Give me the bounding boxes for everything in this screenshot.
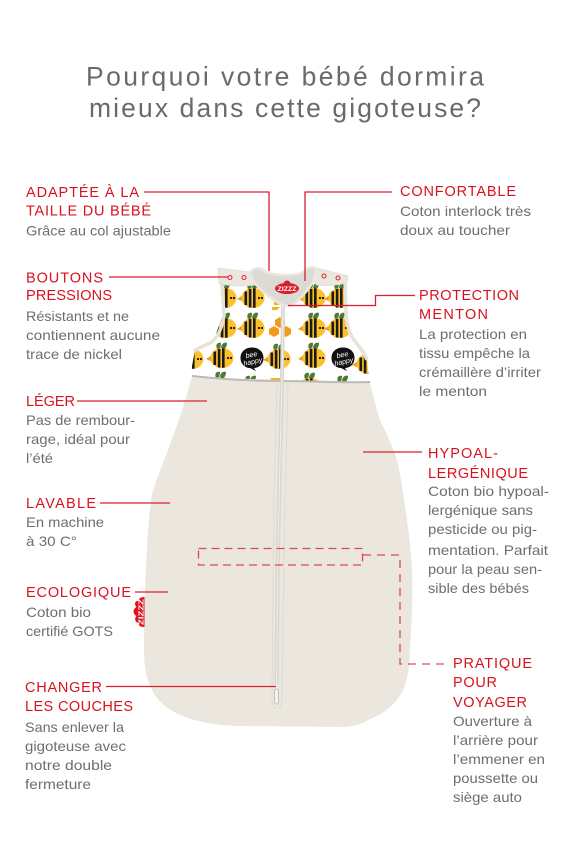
callout: écologique: Coton bio (26, 604, 91, 620)
callout: hypoallergénique: mentation. Parfait (428, 542, 548, 558)
callout: hypoallergénique: LERGÉNIQUE (428, 465, 528, 482)
callout: léger: Pas de rembour- (26, 412, 135, 428)
callout: écologique (26, 585, 131, 639)
callout: protection menton (419, 288, 541, 399)
callout: lavable (26, 496, 104, 549)
red collar label (275, 280, 299, 294)
callout: boutons pressions: Résistants et ne (26, 308, 129, 324)
callout: protection menton: PROTECTION (419, 288, 519, 304)
callout: changer les couches: CHANGER (25, 680, 102, 696)
callout: pratique pour voyager: VOYAGER (453, 695, 527, 711)
snap buttons (228, 274, 340, 280)
callout: hypoallergénique: sible des bébés (428, 580, 529, 596)
callout: changer les couches: Sans enlever la (25, 719, 124, 735)
callout: adaptée: ADAPTÉE À LA (26, 184, 139, 201)
callout: changer les couches: gigoteuse avec (25, 738, 126, 754)
callout: adaptée: TAILLE DU BÉBÉ (26, 202, 151, 220)
callout: boutons pressions: PRESSIONS (26, 288, 112, 304)
callout: léger: rage, idéal pour (26, 431, 130, 447)
callout: écologique: ECOLOGIQUE (26, 585, 131, 601)
callout: boutons pressions (26, 270, 160, 362)
yoke armhole bands (194, 272, 367, 360)
callout: léger: LÉGER (26, 393, 75, 410)
callout: protection menton: MENTON (419, 307, 488, 323)
callout: changer les couches: LES COUCHES (25, 699, 133, 715)
callout: pratique pour voyager: PRATIQUE (453, 656, 532, 672)
small red brand logo: ZIZZZ (136, 598, 146, 625)
callout: pratique pour voyager: Ouverture à (453, 713, 532, 729)
callout: lavable: En machine (26, 514, 104, 530)
callout: boutons pressions: contiennent aucune (26, 327, 160, 343)
illustration: sleeping bag (144, 265, 412, 727)
callout: pratique pour voyager: l’arrière pour (453, 732, 538, 748)
callout: confortable (400, 184, 531, 238)
title: mieux dans cette gigoteuse? (89, 93, 481, 123)
callout: protection menton: crémaillère d’irriter (419, 364, 541, 380)
callout: lavable: à 30 C° (26, 533, 77, 549)
callout: hypoallergénique (428, 446, 549, 596)
callout: boutons pressions: trace de nickel (26, 346, 122, 362)
callout: confortable: doux au toucher (400, 222, 510, 238)
callout: pratique pour voyager: poussette ou (453, 770, 538, 786)
callout: léger (26, 393, 135, 466)
callout: changer les couches: fermeture (25, 776, 91, 792)
callout: hypoallergénique: lergénique sans (428, 502, 533, 518)
leader lines (77, 192, 447, 686)
callout: hypoallergénique: pour la peau sen- (428, 561, 542, 577)
callout: adaptée (26, 184, 171, 238)
callout: protection menton: le menton (419, 383, 487, 399)
shoulders (218, 267, 348, 286)
title: Pourquoi votre bébé dormira (86, 62, 484, 92)
callout: hypoallergénique: Coton bio hypoal- (428, 483, 549, 499)
zipper (272, 306, 288, 709)
callout: confortable: CONFORTABLE (400, 184, 516, 200)
callout: protection menton: tissu empêche la (419, 345, 530, 361)
callout: confortable: Coton interlock très (400, 203, 531, 219)
callout: pratique pour voyager: siège auto (453, 789, 522, 805)
small red brand logo (134, 597, 146, 627)
callout: adaptée: Grâce au col ajustable (26, 222, 171, 238)
sleeping bag body (144, 377, 412, 727)
callout: hypoallergénique: HYPOAL- (428, 446, 498, 462)
callout: hypoallergénique: pesticide ou pig- (428, 521, 537, 537)
waist seam (192, 376, 370, 382)
callout: boutons pressions: BOUTONS (26, 270, 103, 286)
callout: léger: l’été (26, 450, 53, 466)
red collar label: ZIZZZ (278, 286, 297, 293)
callout: pratique pour voyager: POUR (453, 675, 497, 691)
callout: changer les couches (25, 680, 133, 792)
callout: pratique pour voyager (453, 656, 545, 805)
title (86, 62, 484, 123)
collar (250, 267, 315, 306)
callout: pratique pour voyager: l’emmener en (453, 751, 545, 767)
callout: changer les couches: notre double (25, 757, 112, 773)
callout: écologique: certifié GOTS (26, 623, 113, 639)
callout: lavable: LAVABLE (26, 496, 96, 512)
patterned yoke (192, 283, 368, 382)
callout: protection menton: La protection en (419, 326, 527, 342)
